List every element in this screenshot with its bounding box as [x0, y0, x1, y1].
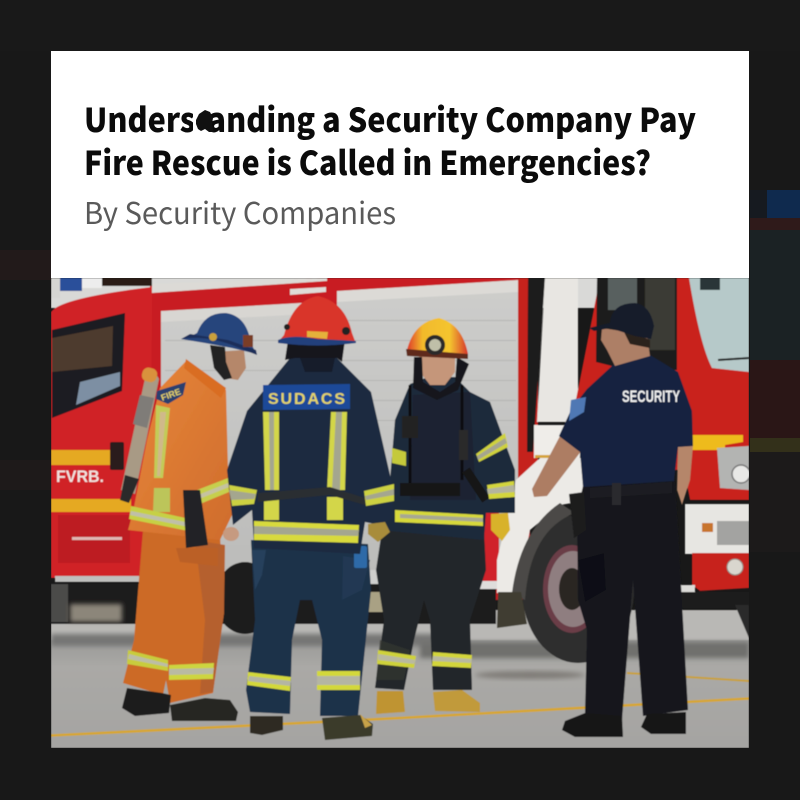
- navy jacket: [227, 354, 393, 554]
- front stripe: [692, 435, 743, 450]
- shutter 2: [337, 288, 518, 572]
- belt: [569, 482, 672, 538]
- black trousers: [577, 480, 688, 720]
- harness and buckles: [400, 385, 486, 500]
- security guard: [532, 303, 693, 737]
- door handle: [110, 442, 124, 470]
- security lettering: SECURITY: [622, 387, 680, 406]
- jacket: [380, 377, 515, 540]
- red and dark pillar: [529, 380, 539, 468]
- orange trousers: [123, 530, 224, 703]
- trousers: [375, 530, 486, 690]
- title: Understanding a Security Company Pay: [84, 94, 696, 142]
- title card: [51, 51, 749, 278]
- wheel arch: [512, 503, 575, 600]
- holster: [183, 490, 208, 548]
- jacket badge: FIRE: [159, 386, 182, 403]
- boots: [250, 714, 373, 740]
- shutter 1: [160, 314, 292, 571]
- back reflective stripes: [229, 412, 394, 543]
- glove: [368, 522, 390, 542]
- firefighter with helmet, centre: [375, 318, 515, 714]
- cab red: [51, 287, 152, 578]
- glove: [491, 513, 510, 541]
- ink blot over title letter: [196, 110, 214, 132]
- byline: By Security Companies: [84, 189, 396, 233]
- trouser bands: [377, 650, 472, 668]
- fire truck: [51, 278, 750, 663]
- white fender: [497, 458, 590, 593]
- under front: [680, 592, 706, 608]
- jacket reflective stripes: [129, 405, 229, 531]
- headlight: [717, 446, 749, 490]
- cab lettering: FVRB.: [56, 467, 104, 486]
- belt: [258, 487, 365, 505]
- sill: [55, 576, 145, 582]
- face: [419, 356, 455, 385]
- trousers: [246, 540, 371, 716]
- back name patch: SUDACS: [268, 391, 345, 408]
- road lines: [51, 673, 749, 736]
- underside: [51, 584, 496, 624]
- air cylinder: [120, 366, 159, 503]
- neck and hood: [285, 340, 345, 362]
- navy helmet: [181, 313, 257, 355]
- yellow stripes on cab: [51, 450, 111, 465]
- jacket badge: [156, 382, 186, 404]
- ground: [51, 610, 749, 748]
- hand: [223, 527, 239, 541]
- orange jacket: [128, 360, 233, 540]
- navy polo shirt: [559, 355, 693, 487]
- red helmet: [278, 296, 356, 346]
- backdrop behind truck: [51, 278, 749, 308]
- arms: [532, 436, 693, 505]
- white pillar: [537, 278, 578, 422]
- firefighter in navy jacket, seen from behind: [227, 296, 394, 740]
- mud flap: [497, 592, 527, 628]
- boots: [122, 688, 238, 721]
- trouser bands: [247, 671, 360, 691]
- shoulder patch: [569, 397, 586, 421]
- title: Fire Rescue is Called in Emergencies?: [84, 137, 651, 185]
- baseball cap: [589, 303, 654, 339]
- body red: [150, 278, 530, 600]
- face: [213, 350, 246, 380]
- lower step: [58, 515, 130, 563]
- jacket reflective bands: [392, 433, 515, 526]
- tyre: [522, 515, 634, 663]
- orange trouser reflective bands: [127, 650, 214, 680]
- cab window: [52, 313, 125, 418]
- wheel rim: [542, 544, 587, 634]
- firefighter in orange turnout gear: [120, 313, 257, 721]
- door window: [596, 278, 677, 370]
- front bumper: [685, 504, 749, 554]
- top rail: [152, 278, 327, 293]
- top flags: [51, 278, 60, 298]
- windshield: [689, 278, 749, 372]
- back name patch: [263, 384, 350, 410]
- black boots: [562, 712, 686, 737]
- boots: [376, 690, 480, 714]
- cab front red: [570, 278, 749, 500]
- photo: firefighters and security guard by a fire truck: [51, 278, 750, 748]
- head and neck: [601, 328, 650, 366]
- white patch hiding the letter under the ink blot: [193, 104, 208, 134]
- yellow helmet: [406, 318, 468, 359]
